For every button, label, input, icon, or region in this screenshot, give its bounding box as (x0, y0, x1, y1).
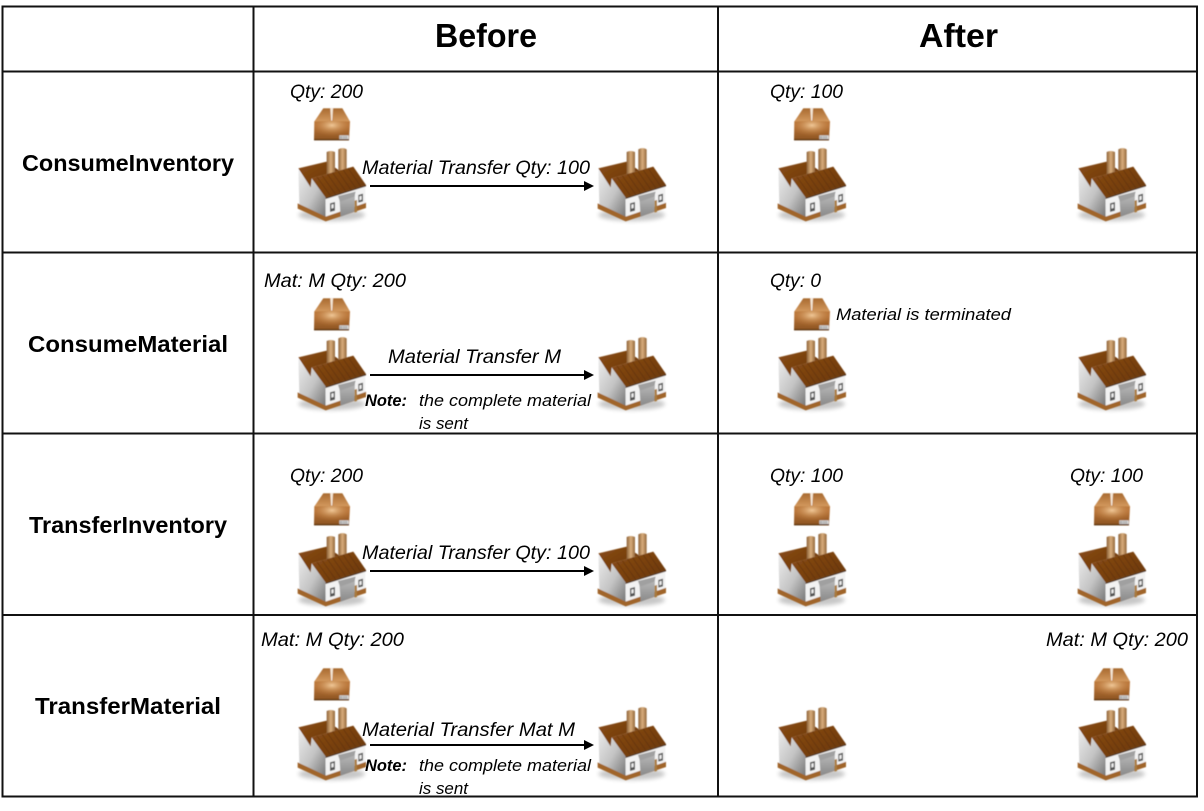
icon: source factory (778, 707, 846, 780)
icon: destination box (1094, 493, 1130, 525)
arrow (370, 740, 594, 750)
quantity label: Qty: 200 (290, 465, 363, 487)
row label: TransferMaterial: TransferMaterial (35, 693, 221, 719)
arrow (370, 566, 594, 576)
termination label: Material is terminated (836, 305, 1012, 324)
note (365, 756, 592, 798)
note: the complete material (419, 391, 592, 410)
panel: ConsumeMaterial before (264, 270, 666, 433)
transfer label: Material Transfer Mat M (362, 719, 576, 741)
source quantity label: Qty: 100 (770, 465, 843, 487)
transfer label: Material Transfer M (388, 346, 562, 368)
panel: TransferMaterial before (261, 629, 666, 798)
icon: destination factory (598, 148, 666, 221)
icon: box (314, 298, 350, 330)
arrow (370, 370, 594, 380)
icon: destination factory (598, 337, 666, 410)
note: Note: (365, 391, 407, 410)
icon: source factory (298, 148, 366, 221)
destination quantity label: Qty: 100 (1070, 465, 1143, 487)
icon: box (314, 108, 350, 140)
transfer label: Material Transfer Qty: 100 (362, 157, 590, 179)
icon: destination factory (1078, 707, 1146, 780)
icon: box (1094, 668, 1130, 700)
quantity label: Qty: 0 (770, 270, 821, 292)
panel: TransferInventory after (770, 465, 1146, 606)
note: the complete material (419, 756, 592, 775)
icon: destination factory (598, 533, 666, 606)
icon: destination factory (1078, 148, 1146, 221)
icon: box (314, 493, 350, 525)
icon: box (794, 108, 830, 140)
header: Before: Before (435, 17, 537, 54)
row label: ConsumeInventory: ConsumeInventory (22, 150, 234, 176)
row label: ConsumeMaterial: ConsumeMaterial (28, 331, 228, 357)
panel: TransferInventory before (290, 465, 666, 606)
material quantity label: Mat: M Qty: 200 (261, 629, 404, 651)
icon: box (314, 668, 350, 700)
icon: destination factory (1078, 533, 1146, 606)
arrow (370, 181, 594, 191)
row label: TransferInventory: TransferInventory (29, 512, 227, 538)
icon: source factory (298, 337, 366, 410)
transfer label: Material Transfer Qty: 100 (362, 542, 590, 564)
icon: source factory (298, 533, 366, 606)
panel: ConsumeInventory before (290, 81, 666, 221)
icon: source factory (778, 337, 846, 410)
quantity label: Qty: 200 (290, 81, 363, 103)
note (365, 391, 592, 433)
panel: ConsumeInventory after (770, 81, 1146, 221)
icon: source box (794, 493, 830, 525)
note: is sent (419, 779, 469, 798)
icon: source factory (778, 533, 846, 606)
icon: source factory (298, 707, 366, 780)
panel: TransferMaterial after (778, 629, 1188, 780)
material quantity label: Mat: M Qty: 200 (1046, 629, 1188, 651)
panel: ConsumeMaterial after (770, 270, 1146, 410)
header: After: After (919, 17, 998, 54)
note: is sent (419, 414, 469, 433)
note: Note: (365, 756, 407, 775)
icon: destination factory (1078, 337, 1146, 410)
material quantity label: Mat: M Qty: 200 (264, 270, 406, 292)
icon: source factory (778, 148, 846, 221)
icon: destination factory (598, 707, 666, 780)
icon: box (794, 298, 830, 330)
quantity label: Qty: 100 (770, 81, 843, 103)
